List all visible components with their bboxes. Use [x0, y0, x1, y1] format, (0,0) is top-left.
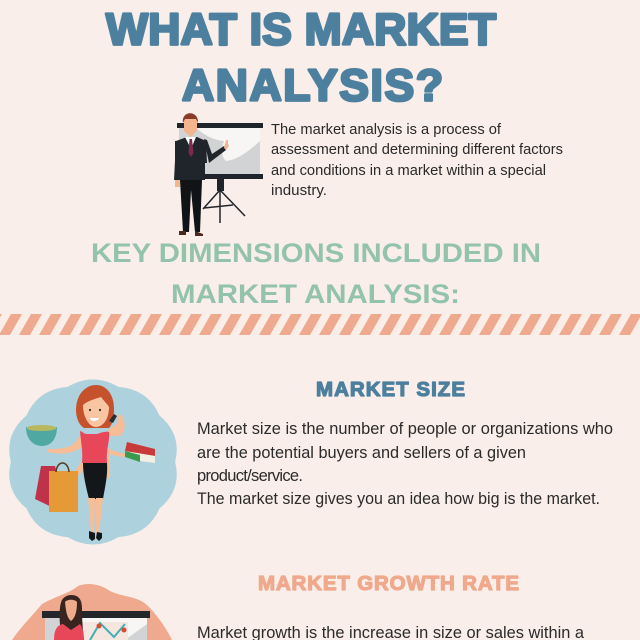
intro text: industry.: [271, 183, 327, 199]
text: market size: The market size gives you an idea how big is the market.: [197, 490, 600, 508]
intro text: [271, 122, 563, 199]
title: WHAT IS MARKET: [106, 6, 496, 54]
title: ANALYSIS?: [182, 62, 443, 110]
intro text: The market analysis is a process of: [271, 122, 502, 138]
heading: key dimensions: [91, 238, 541, 309]
icon: presenter at projection screen: [174, 113, 263, 236]
icon: woman presenting growth chart on salmon badge: [12, 584, 172, 640]
heading: market growth rate: MARKET GROWTH RATE: [258, 572, 519, 595]
text: market size: [197, 420, 613, 508]
icon: multitasking woman on blue badge: [9, 379, 177, 545]
striped divider: [0, 314, 640, 335]
text: market size: product/service.: [197, 467, 303, 485]
heading: key dimensions: KEY DIMENSIONS INCLUDED IN: [91, 238, 541, 268]
heading: market size: MARKET SIZE: [316, 378, 465, 401]
intro text: and conditions in a market within a special: [271, 163, 546, 179]
text: market size: Market size is the number of people or organizations who: [197, 420, 613, 438]
text: market size: are the potential buyers and sellers of a given: [197, 444, 526, 462]
intro text: assessment and determining different factors: [271, 142, 563, 158]
heading: key dimensions: MARKET ANALYSIS:: [171, 279, 460, 309]
title: [106, 6, 496, 110]
